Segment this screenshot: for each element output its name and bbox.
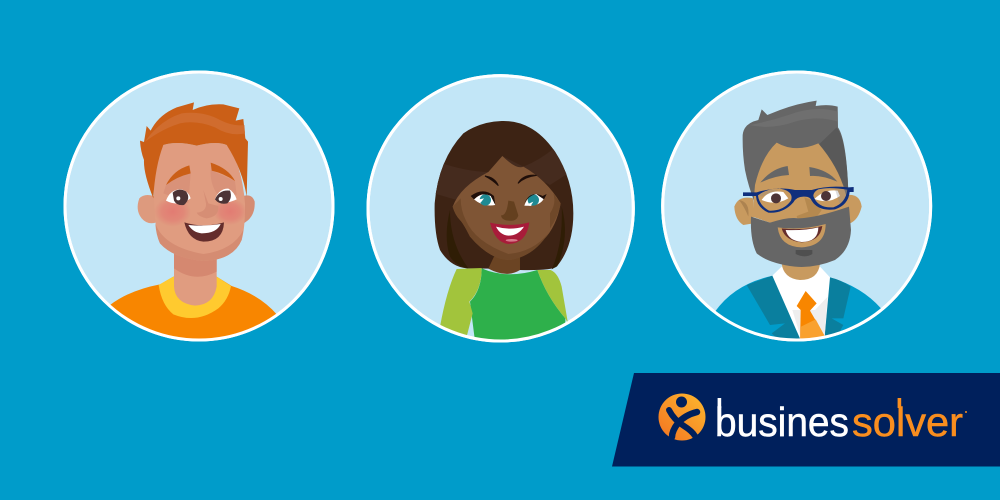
irises — [480, 194, 491, 206]
left ear — [138, 195, 156, 224]
logo banner — [612, 373, 1000, 466]
yellow collar — [159, 277, 231, 318]
jaw shade — [155, 223, 243, 261]
hair — [140, 102, 248, 198]
logo wordmark: solver — [852, 399, 963, 445]
neck — [488, 257, 520, 274]
logo wordmark — [715, 398, 967, 445]
eyebrows — [760, 166, 837, 183]
teeth — [188, 224, 221, 233]
blue jacket — [715, 276, 881, 347]
right ear — [847, 195, 862, 223]
teeth — [496, 227, 524, 236]
portrait: woman with dark bob — [368, 76, 633, 347]
hair — [435, 121, 573, 270]
eyebrows — [485, 175, 537, 186]
hair inner shadow — [447, 207, 565, 269]
eyes — [762, 190, 840, 203]
nose — [501, 201, 518, 221]
chin tuft — [796, 250, 812, 256]
face — [752, 143, 850, 223]
orange t-shirt — [110, 276, 276, 338]
orange tie — [797, 291, 825, 347]
lower lip — [778, 224, 826, 247]
open mouth — [184, 222, 224, 242]
mouth interior — [782, 226, 822, 242]
hair shade — [818, 127, 848, 193]
brow and nose-bridge shade — [163, 170, 237, 203]
lens tint — [757, 189, 848, 205]
right sleeve — [537, 270, 568, 323]
portrait: grey-haired man with glasses — [663, 72, 931, 347]
neck — [174, 260, 217, 306]
lips — [490, 222, 529, 244]
white shirt — [772, 267, 830, 340]
illustration canvas — [64, 70, 1000, 466]
nose — [797, 197, 822, 222]
eyebrows — [166, 163, 235, 185]
eyes — [474, 193, 544, 206]
logo icon — [658, 394, 706, 440]
eye highlights — [476, 198, 533, 206]
face — [154, 143, 245, 261]
tie highlight — [800, 319, 825, 347]
beard — [751, 207, 851, 267]
face shade — [453, 193, 561, 260]
cheeks — [157, 200, 188, 224]
glasses — [743, 187, 854, 213]
hair — [743, 101, 848, 203]
pupils — [173, 190, 231, 205]
eyes — [166, 189, 237, 204]
left lapel — [747, 276, 801, 340]
pupils — [771, 193, 781, 203]
logo wordmark: busines — [715, 399, 849, 445]
hair highlight — [749, 109, 838, 127]
inner ear — [739, 200, 749, 217]
left sleeve — [440, 268, 482, 337]
right lapel — [823, 277, 851, 340]
hair highlight band — [436, 149, 566, 200]
neck shadow — [174, 254, 217, 277]
teeth — [786, 227, 818, 242]
neck — [782, 263, 820, 280]
face — [453, 156, 561, 260]
portrait: red-haired man — [65, 72, 333, 347]
eyelashes — [471, 191, 547, 205]
lip highlight — [506, 239, 518, 242]
left ear — [734, 198, 753, 225]
nose — [197, 190, 218, 218]
right ear — [244, 195, 255, 223]
hair highlight — [145, 113, 245, 142]
green top — [470, 268, 565, 347]
shirt shade — [792, 297, 828, 340]
